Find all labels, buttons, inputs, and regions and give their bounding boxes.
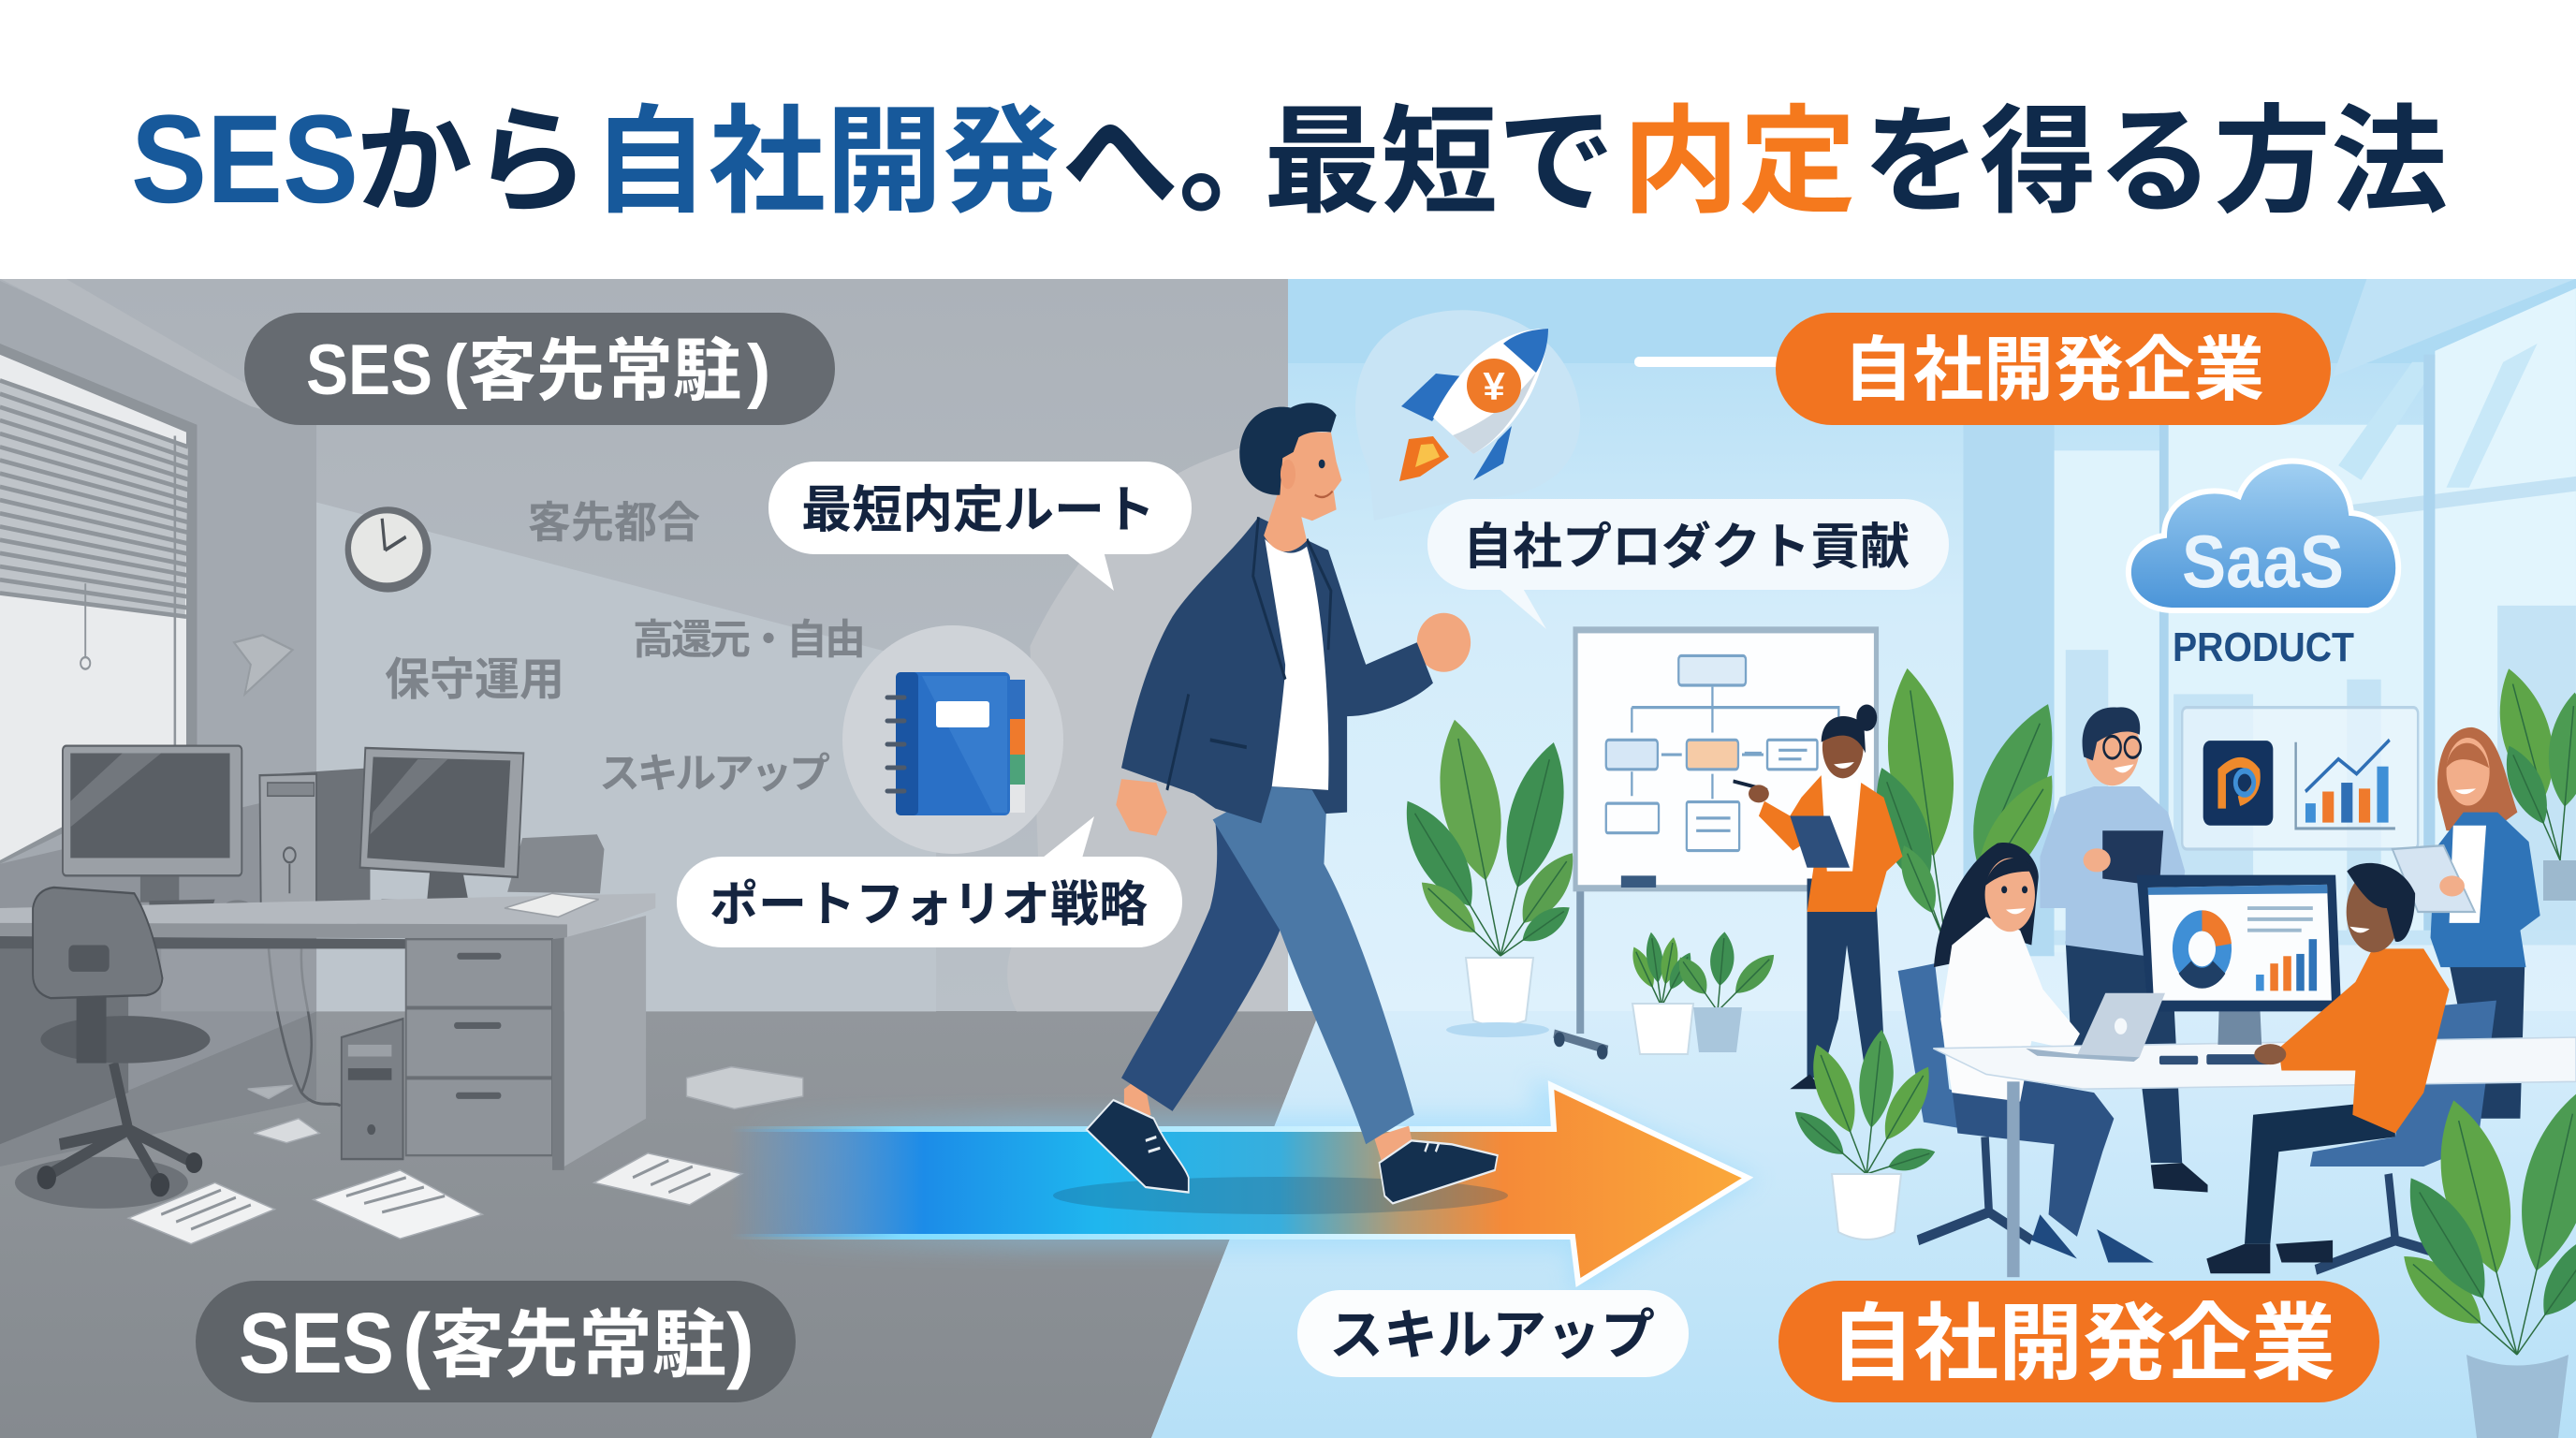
monitor left: [63, 746, 242, 914]
bubble: rocket circle: [1355, 310, 1580, 521]
bubble: notebook circle: [842, 625, 1063, 854]
monitor right: [335, 748, 523, 917]
callout: portfolio strategy: [677, 816, 1182, 947]
icon: rocket: ¥: [1483, 364, 1505, 408]
person: seated woman: [1898, 843, 2154, 1262]
callout: product contribution: 自社プロダクト貢献: [1463, 520, 1910, 575]
title: 自社開発: [592, 97, 1060, 227]
faded labels: スキルアップ: [599, 751, 830, 797]
callout: fastest route: [768, 462, 1192, 591]
icon: rocket: [1399, 329, 1548, 481]
pill: in-house bottom: [1778, 1281, 2379, 1402]
person: seated man chair back: [2310, 1001, 2496, 1269]
team scene: [1734, 704, 2576, 1277]
title: 最短で: [1264, 97, 1615, 227]
arrow: career path: [730, 1077, 1760, 1297]
pill: SES top: (: [444, 330, 468, 410]
pill: SES bottom: ): [726, 1298, 754, 1391]
office chair: [15, 888, 211, 1209]
small plants: [1627, 931, 1781, 1054]
cloud: SaaS product: PRODUCT: [2173, 624, 2354, 670]
wall crack: [234, 635, 293, 694]
connector line: [1634, 357, 1779, 367]
title: へ。: [1061, 97, 1295, 227]
pill: in-house top: [1776, 313, 2331, 425]
callout: skill up: スキルアップ: [1329, 1305, 1655, 1366]
desk with monitor and laptop: [1933, 875, 2576, 1277]
faded labels: [385, 498, 866, 797]
title: [0, 0, 2576, 279]
icon: notebook: [887, 672, 1025, 815]
pill: SES top: [244, 313, 835, 425]
window wall: [1963, 279, 2576, 956]
faded labels: 高還元・自由: [633, 617, 866, 663]
person: walking man: [1087, 403, 1498, 1203]
faded labels: 客先都合: [528, 498, 700, 547]
bubble: portfolio backdrop: [1007, 436, 1288, 1011]
person: woman with documents: [2393, 727, 2540, 1119]
icon: wall clock: [345, 506, 431, 593]
pill: SES top: SES: [306, 330, 432, 410]
scattered papers: [128, 1067, 803, 1244]
icon: window with blinds: [0, 344, 197, 864]
pill: SES bottom: [196, 1281, 796, 1402]
faded labels: 保守運用: [385, 655, 564, 705]
person: seated man: [2206, 863, 2450, 1273]
panel: in-house office (blue): [1151, 279, 2576, 1438]
plant behind team: [1861, 664, 2075, 957]
plant front centre: [1787, 1028, 1941, 1240]
person: presenter in orange: [1734, 704, 1903, 1089]
whiteboard: [1554, 630, 1876, 1060]
pill: SES bottom: SES: [239, 1296, 394, 1391]
right plant: [2486, 663, 2576, 901]
cables: [269, 948, 341, 1106]
computer tower: [259, 768, 370, 908]
panel: SES office (grey): [0, 279, 1320, 1438]
callout: portfolio strategy: ポートフォリオ戦略: [710, 878, 1148, 932]
mouse: [224, 900, 252, 915]
wall under desk: [161, 948, 316, 1011]
plant near whiteboard: [1389, 714, 1586, 1037]
cloud: SaaS product: [2129, 461, 2398, 670]
pill: in-house top: 自社開発企業: [1843, 330, 2264, 409]
person: man with glasses: [2040, 707, 2208, 1193]
callout: product contribution: [1427, 499, 1949, 629]
computer tower floor: [342, 1019, 403, 1159]
cloud: SaaS product: SaaS: [2182, 520, 2344, 603]
plant lower right: [2390, 1086, 2576, 1438]
back chair: [507, 834, 604, 893]
pill: in-house bottom: 自社開発企業: [1830, 1298, 2335, 1391]
pill: SES bottom: (: [402, 1298, 431, 1391]
callout: skill up: [1297, 1290, 1689, 1377]
pill: SES top: ): [747, 330, 770, 410]
pill: SES top: 客先常駐: [468, 333, 741, 409]
desk: [0, 893, 655, 1170]
title: SES: [131, 90, 359, 229]
pill: SES bottom: 客先常駐: [431, 1303, 726, 1387]
dashboard panel: [2182, 708, 2418, 849]
title: を得る方法: [1863, 97, 2448, 227]
title: から: [356, 97, 590, 227]
title: 内定: [1622, 97, 1856, 227]
callout: fastest route: 最短内定ルート: [801, 482, 1155, 538]
